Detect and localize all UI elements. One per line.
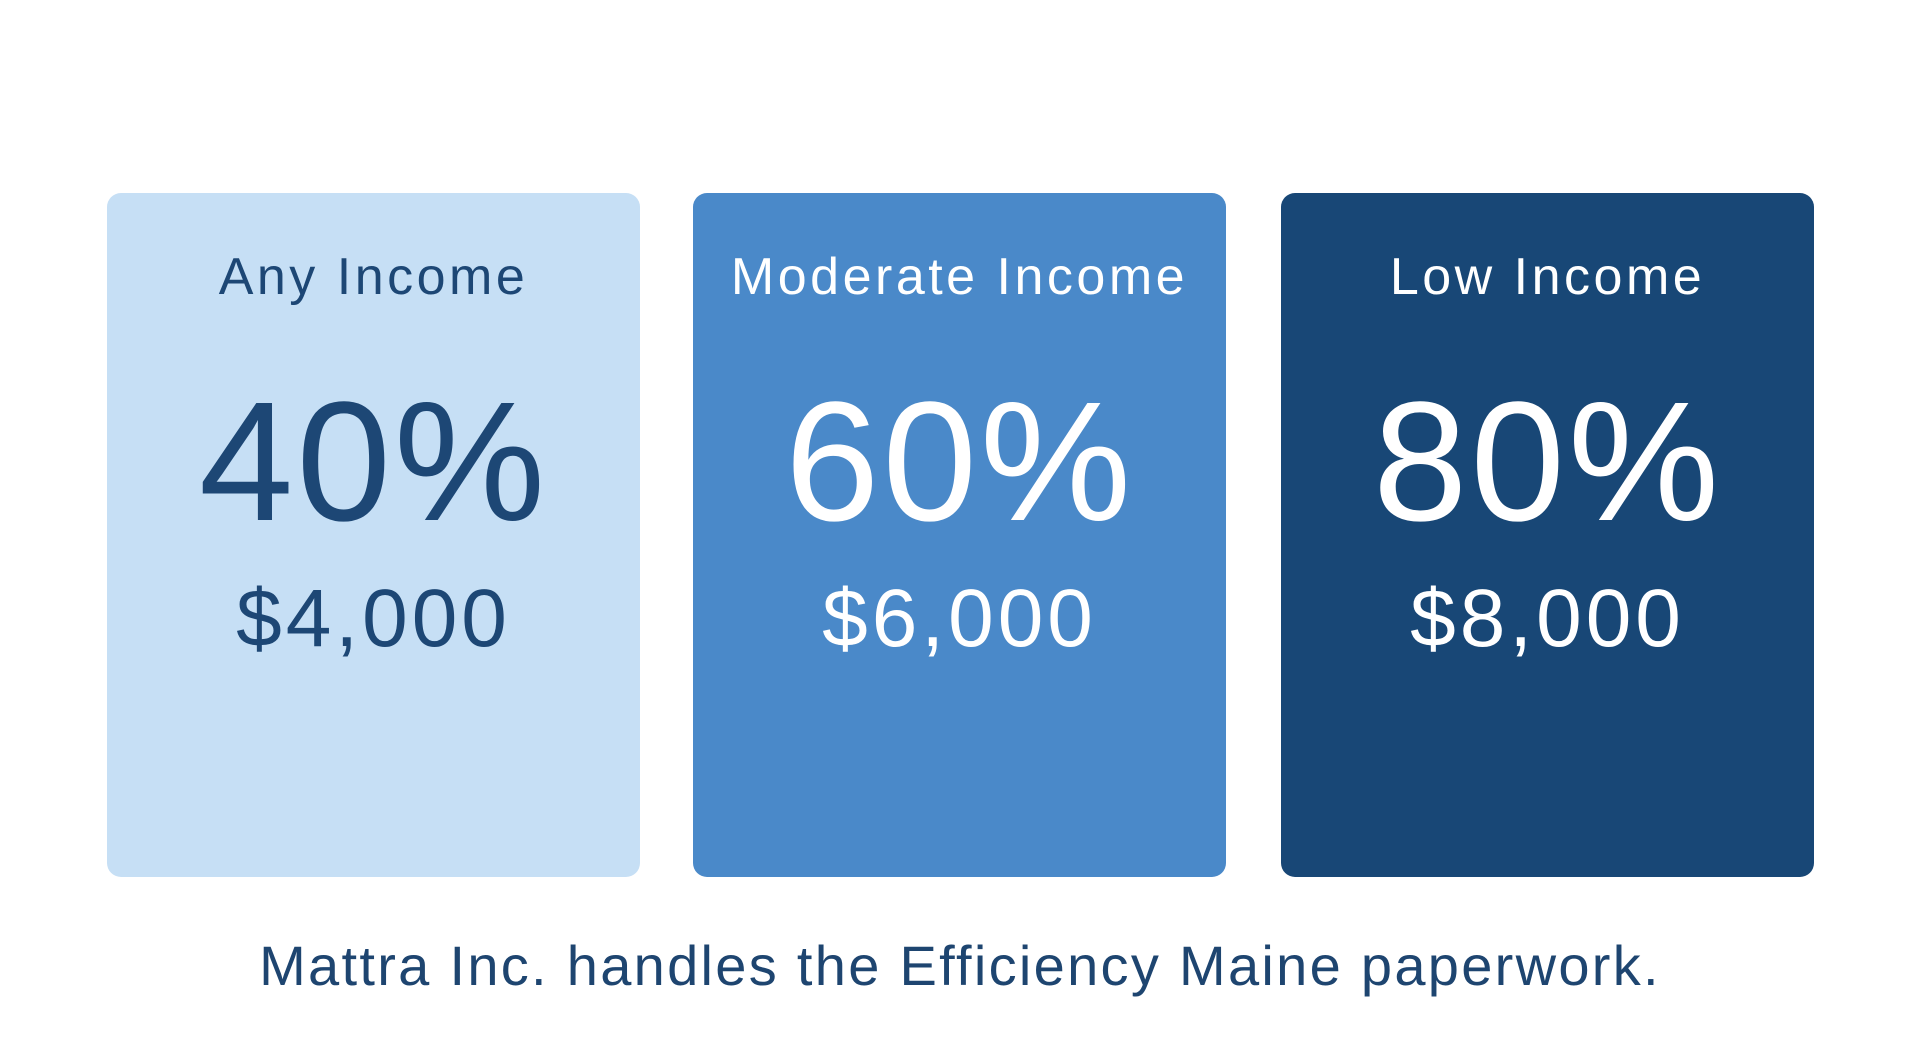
panel: any income — [107, 193, 640, 877]
heading: any income: Any Income — [219, 248, 528, 306]
amount 4000: $4,000 — [236, 573, 511, 664]
heading: moderate income: Moderate Income — [731, 248, 1188, 306]
amount 6000: $6,000 — [822, 573, 1097, 664]
panel: low income — [1281, 193, 1814, 877]
percent 80: 80% — [1373, 367, 1722, 557]
amount 8000: $8,000 — [1410, 573, 1685, 664]
percent 60: 60% — [785, 367, 1134, 557]
footer text: Mattra Inc. handles the Efficiency Maine paperwork. — [259, 934, 1661, 997]
percent 40: 40% — [199, 367, 548, 557]
heading: low income: Low Income — [1390, 248, 1705, 306]
panel: moderate income — [693, 193, 1226, 877]
